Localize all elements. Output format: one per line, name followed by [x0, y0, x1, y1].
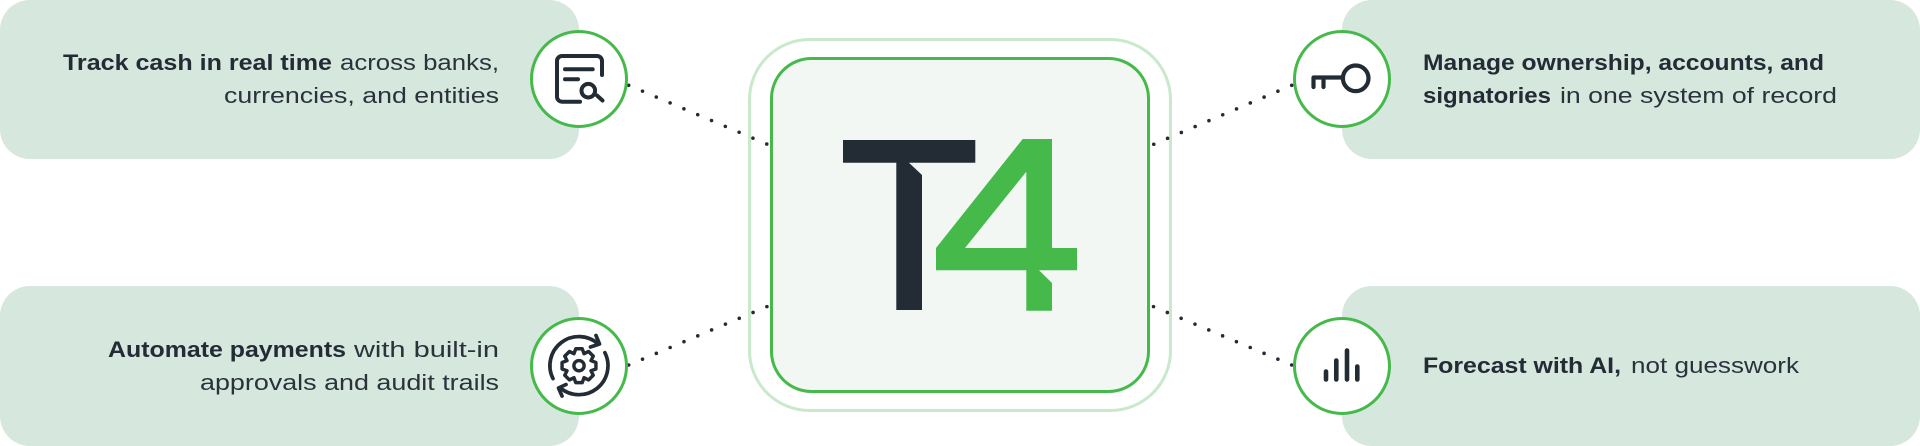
panel: track cash — [0, 0, 579, 159]
text: automate payments — [108, 337, 499, 395]
icon: bars — [1294, 318, 1390, 414]
text: forecast: not guesswork — [1631, 353, 1800, 378]
text: forecast — [1423, 353, 1800, 378]
icon: key — [1294, 32, 1390, 126]
central logo panel — [750, 40, 1170, 410]
connector: bottom left — [629, 306, 767, 365]
connector: top right — [1153, 85, 1292, 144]
text: track cash: across banks, — [340, 50, 499, 75]
text: automate payments: Automate payments — [108, 337, 346, 362]
text: manage ownership: signatories — [1423, 83, 1551, 108]
text: track cash: Track cash in real time — [63, 50, 332, 75]
text: track cash: currencies, and entities — [224, 83, 499, 108]
panel: manage ownership — [1342, 0, 1920, 159]
connector: bottom right — [1153, 306, 1292, 365]
text: manage ownership — [1423, 50, 1837, 108]
text: manage ownership: Manage ownership, accounts, and — [1423, 50, 1824, 75]
text: track cash — [63, 50, 499, 108]
text: automate payments: with built-in — [353, 337, 499, 362]
icon: gear with cycle arrows — [532, 318, 626, 414]
text: forecast: Forecast with AI, — [1423, 353, 1621, 378]
connector: top left — [629, 85, 767, 144]
panel: automate payments — [0, 286, 579, 446]
logo: 4 — [936, 139, 1077, 311]
text: manage ownership: in one system of record — [1560, 83, 1837, 108]
logo: T — [843, 140, 975, 310]
panel: forecast — [1342, 286, 1920, 446]
text: automate payments: approvals and audit trails — [200, 370, 499, 395]
icon: document search — [532, 32, 626, 126]
